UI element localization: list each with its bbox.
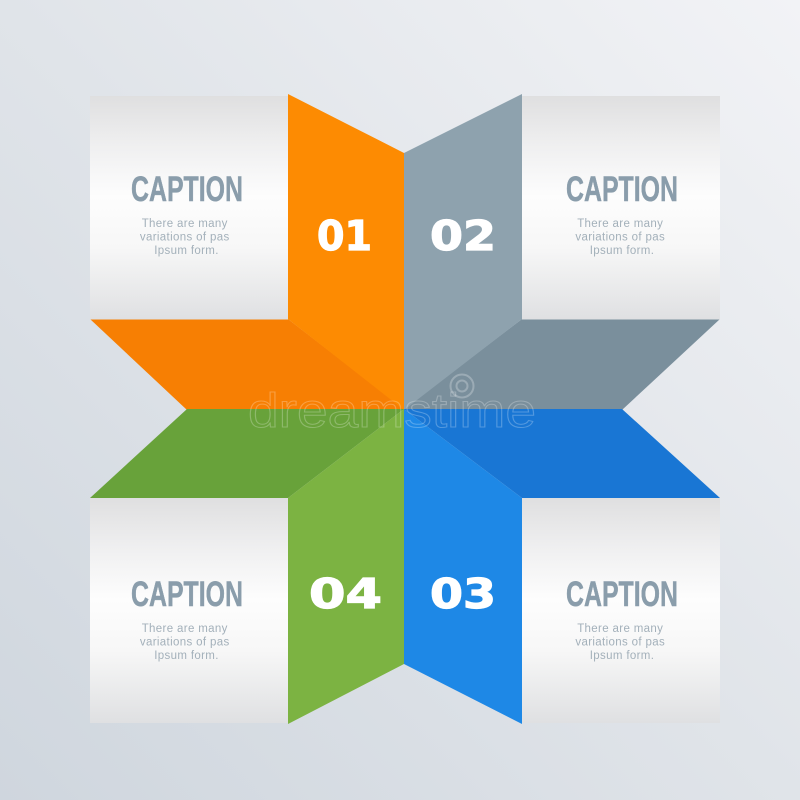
number 02: 02 (430, 212, 496, 260)
panel 03: blue (404, 409, 720, 724)
text block 01: variations of pas (140, 232, 230, 244)
number 01: 01 (317, 212, 372, 260)
text block 01: There are many (142, 218, 228, 230)
text block 04: Ipsum form. (154, 650, 219, 662)
panel 04: green (90, 409, 404, 724)
caption card 04 (90, 498, 288, 723)
text block 03: There are many (577, 623, 663, 635)
green top fold (90, 409, 404, 498)
watermark (248, 374, 536, 438)
text block 03: Ipsum form. (590, 650, 654, 662)
grey wall fold (404, 94, 522, 410)
text block 02: There are many (577, 218, 663, 230)
watermark swirl (450, 374, 474, 398)
grey floor fold (404, 319, 720, 410)
panel 02: grey (404, 94, 720, 410)
blue top fold (404, 409, 720, 498)
panel 01: orange (90, 94, 404, 410)
orange wall fold (288, 94, 404, 410)
blue wall fold (404, 409, 522, 724)
text block 02: variations of pas (575, 232, 665, 244)
caption card 02 (522, 96, 720, 320)
orange floor fold (90, 319, 404, 410)
heading 03: CAPTION (566, 575, 678, 614)
caption card 01 (90, 96, 288, 320)
heading 04: CAPTION (131, 575, 243, 614)
number 03: 03 (430, 570, 496, 618)
watermark word: dreamstime (248, 385, 536, 438)
heading 01: CAPTION (131, 170, 243, 209)
text block 04: There are many (142, 623, 228, 635)
caption card 03 (522, 498, 720, 723)
text block 01: Ipsum form. (154, 245, 219, 257)
text block 04: variations of pas (140, 636, 230, 648)
text block 02: Ipsum form. (590, 245, 654, 257)
heading 02: CAPTION (566, 170, 678, 209)
number 04: 04 (309, 570, 382, 618)
green wall fold (288, 409, 404, 724)
text block 03: variations of pas (575, 636, 665, 648)
